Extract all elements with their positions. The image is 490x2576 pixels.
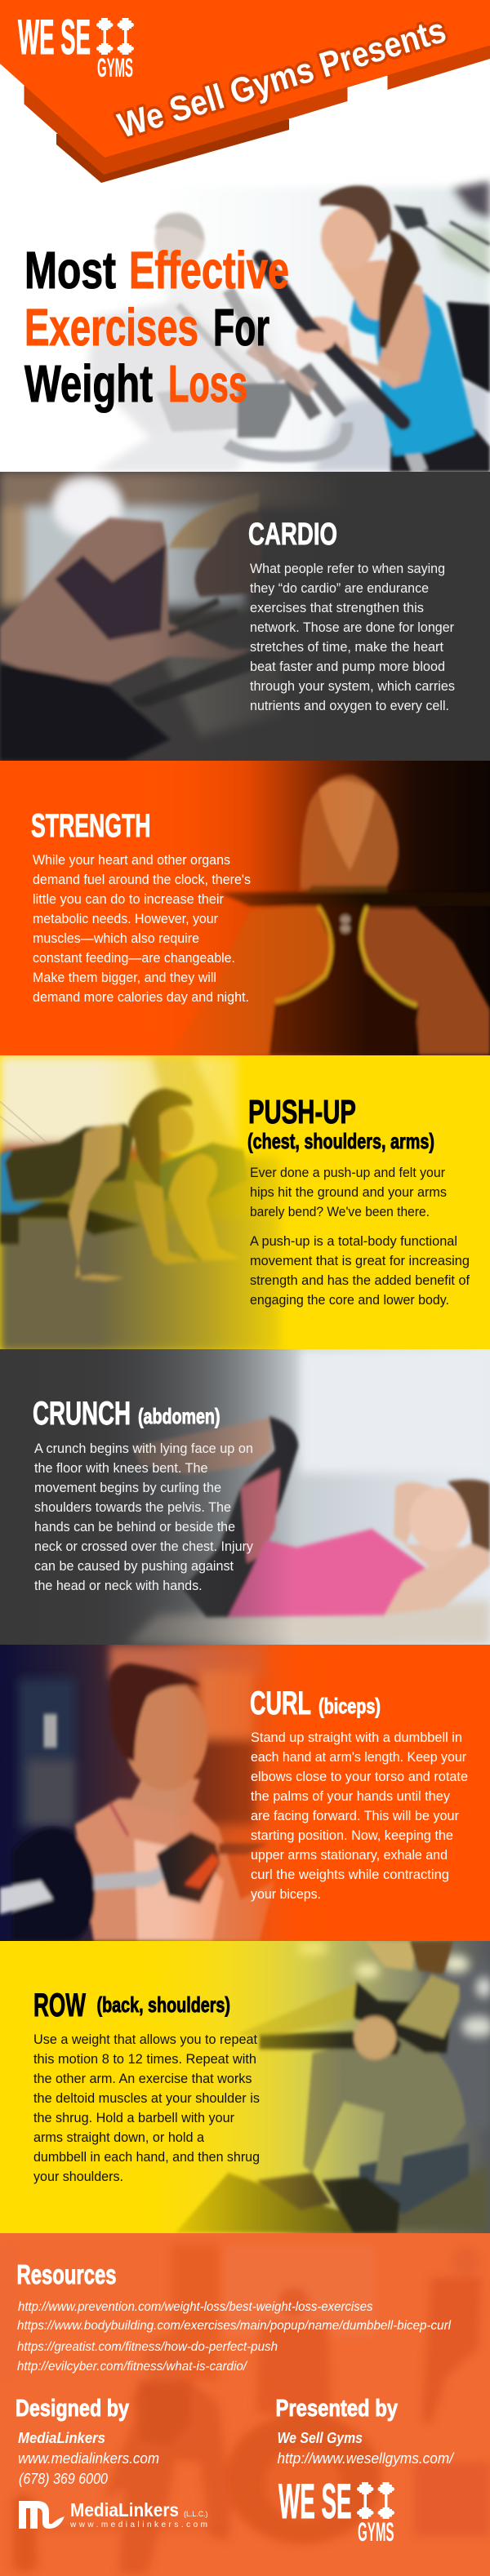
text: curl body: upper arms stationary, exhale and — [251, 1848, 448, 1863]
text: designer details — [18, 2430, 159, 2487]
text: crunch body — [34, 1441, 254, 1593]
text: push-up body: Ever done a push-up and felt your — [250, 1166, 445, 1180]
text: push-up body — [250, 1166, 470, 1308]
icon: footer dumbbell right — [377, 2482, 394, 2519]
heading: row: ROW — [33, 1988, 86, 2023]
panel: cardio — [0, 472, 490, 761]
text: resource links — [17, 2300, 451, 2374]
panel: curl — [0, 1645, 490, 1941]
panel: footer — [0, 2233, 490, 2576]
subheading: curl muscles: (biceps) — [318, 1694, 381, 1718]
panel: push-up — [0, 1055, 490, 1352]
text: crunch body: the floor with knees bent. The — [34, 1461, 207, 1476]
text: curl body: the palms of your hands until they — [251, 1789, 451, 1804]
panel: footer: GYMS — [358, 2517, 394, 2547]
text: crunch body: the head or neck with hands. — [34, 1579, 203, 1593]
text: row body: the shrug. Hold a barbell with your — [33, 2111, 234, 2125]
panel: crunch — [0, 1349, 490, 1645]
text: cardio body: exercises that strengthen this — [250, 601, 424, 615]
text: crunch body: movement begins by curling the — [34, 1481, 221, 1495]
text: presenter details — [278, 2430, 455, 2467]
logo: We Sell Gyms: WE SE — [18, 10, 91, 64]
text: row body: your shoulders. — [33, 2170, 123, 2184]
text: push-up body: barely bend? We've been there. — [250, 1205, 430, 1219]
text: crunch body: hands can be behind or beside the — [34, 1520, 235, 1534]
logo: MediaLinkers: MediaLinkers — [70, 2499, 179, 2520]
text: curl body: elbows close to your torso and rotate — [251, 1770, 468, 1784]
text: push-up body: hips hit the ground and your arms — [250, 1185, 447, 1200]
text: cardio body — [250, 562, 455, 713]
text: curl body: your biceps. — [251, 1887, 321, 1902]
title — [24, 241, 289, 413]
photo: woman curling a barbell — [0, 1645, 490, 1941]
text: crunch body: can be caused by pushing against — [34, 1559, 234, 1574]
heading: designed by: Designed by — [16, 2396, 129, 2422]
text: crunch body: A crunch begins with lying face up on — [34, 1441, 253, 1456]
panel: row — [0, 1941, 490, 2233]
subheading: push-up muscles: (chest, shoulders, arms) — [247, 1129, 434, 1153]
title: Loss — [168, 354, 247, 413]
title: Exercises — [24, 298, 198, 357]
photo: woman on rowing machine — [0, 1941, 490, 2233]
text: strength body: While your heart and other organs — [33, 853, 230, 868]
text: strength body — [33, 853, 251, 1005]
heading: push-up: PUSH-UP — [248, 1093, 356, 1130]
title: Effective — [129, 241, 289, 300]
text: cardio body: through your system, which carries — [250, 679, 455, 694]
panel: hero — [0, 0, 490, 472]
heading: presented by: Presented by — [276, 2396, 398, 2422]
text: resource links: http://evilcyber.com/fitness/what-is-cardio/ — [17, 2360, 247, 2374]
text: crunch body: neck or crossed over the chest. Injury — [34, 1539, 254, 1554]
text: push-up body: engaging the core and lower body. — [250, 1293, 449, 1308]
photo: woman on bike — [0, 472, 490, 761]
text: push-up body: A push-up is a total-body functional — [250, 1234, 457, 1249]
text: row body: this motion 8 to 12 times. Repeat with — [33, 2052, 256, 2067]
logo: MediaLinkers: www.medialinkers.com — [69, 2520, 207, 2529]
text: strength body: constant feeding—are changeable. — [33, 951, 235, 966]
icon: dumbbell left — [96, 18, 113, 55]
text: curl body: starting position. Now, keeping the — [251, 1828, 453, 1843]
photo: gym group tinted orange — [0, 2233, 490, 2576]
logo: We Sell Gyms footer — [278, 2474, 394, 2547]
text: strength body: Make them bigger, and they will — [33, 970, 216, 985]
text: strength body: demand fuel around the clock, there's — [33, 873, 251, 887]
photo: woman on elliptical trainer — [87, 176, 490, 472]
text: row body — [33, 2032, 260, 2184]
heading: strength: STRENGTH — [31, 808, 150, 844]
title: Weight — [24, 354, 153, 413]
heading: curl: CURL — [250, 1686, 311, 1721]
heading: resources: Resources — [16, 2259, 116, 2290]
header banner — [0, 0, 490, 183]
title: For — [213, 298, 270, 357]
icon: dumbbell right — [118, 18, 134, 55]
text: row body: dumbbell in each hand, and then shrug — [33, 2150, 260, 2165]
panel: strength — [0, 761, 490, 1055]
text: curl body: each hand at arm's length. Keep your — [251, 1750, 466, 1765]
text: designer details: MediaLinkers — [18, 2430, 105, 2446]
text: strength body: demand more calories day and night. — [33, 990, 249, 1005]
logo: We Sell Gyms — [18, 10, 134, 82]
text: row body: the other arm. An exercise that works — [33, 2072, 252, 2086]
text: curl body: curl the weights while contracting — [251, 1868, 449, 1882]
text: resource links: https://www.bodybuilding.com/exercises/main/popup/name/dumbbell-bicep-curl — [17, 2319, 451, 2333]
logo: MediaLinkers: (L.L.C.) — [184, 2510, 207, 2518]
text: presenter details: http://www.wesellgyms.com/ — [278, 2450, 455, 2467]
icon: footer dumbbell left — [357, 2482, 374, 2519]
text: cardio body: network. Those are done for longer — [250, 620, 454, 635]
text: curl body: Stand up straight with a dumbbell in — [251, 1730, 462, 1745]
text: push-up body: strength and has the added benefit of — [250, 1273, 470, 1288]
text: designer details: www.medialinkers.com — [18, 2450, 159, 2467]
text: designer details: (678) 369 6000 — [19, 2471, 108, 2487]
heading: cardio: CARDIO — [248, 517, 337, 552]
text: strength body: metabolic needs. However, your — [33, 912, 218, 926]
text: row body: arms straight down, or hold a — [33, 2130, 205, 2145]
text: crunch body: shoulders towards the pelvis. The — [34, 1500, 231, 1515]
text: cardio body: stretches of time, make the heart — [250, 640, 443, 655]
header banner: GYMS — [97, 53, 133, 82]
text: resource links: http://www.prevention.com/weight-loss/best-weight-loss-exercises — [18, 2300, 372, 2314]
photo: two people doing push-ups — [0, 1055, 490, 1349]
logo: We Sell Gyms footer: WE SE — [278, 2474, 351, 2529]
text: push-up body: movement that is great for increasing — [250, 1254, 470, 1268]
heading: crunch: CRUNCH — [33, 1396, 131, 1432]
text: cardio body: What people refer to when saying — [250, 562, 445, 576]
text: cardio body: nutrients and oxygen to every cell. — [250, 699, 449, 713]
text: presenter details: We Sell Gyms — [278, 2430, 363, 2446]
photo: woman doing a crunch — [0, 1349, 490, 1645]
text: curl body: are facing forward. This will be your — [251, 1809, 459, 1823]
text: curl body — [251, 1730, 468, 1902]
text: cardio body: they “do cardio” are endurance — [250, 581, 429, 596]
text: row body: the deltoid muscles at your shoulder is — [33, 2091, 260, 2106]
photo: woman with barbell from behind — [0, 761, 490, 1055]
text: strength body: muscles—which also require — [33, 931, 199, 946]
subheading: crunch muscles: (abdomen) — [138, 1404, 220, 1428]
text: cardio body: beat faster and pump more blood — [250, 660, 445, 674]
subheading: row muscles: (back, shoulders) — [96, 1992, 230, 2017]
text: row body: Use a weight that allows you to repeat — [33, 2032, 257, 2047]
text: resource links: https://greatist.com/fitness/how-do-perfect-push — [17, 2340, 278, 2354]
text: strength body: little you can do to increase their — [33, 892, 224, 907]
logo: MediaLinkers — [19, 2499, 207, 2529]
title: Most — [24, 241, 116, 300]
